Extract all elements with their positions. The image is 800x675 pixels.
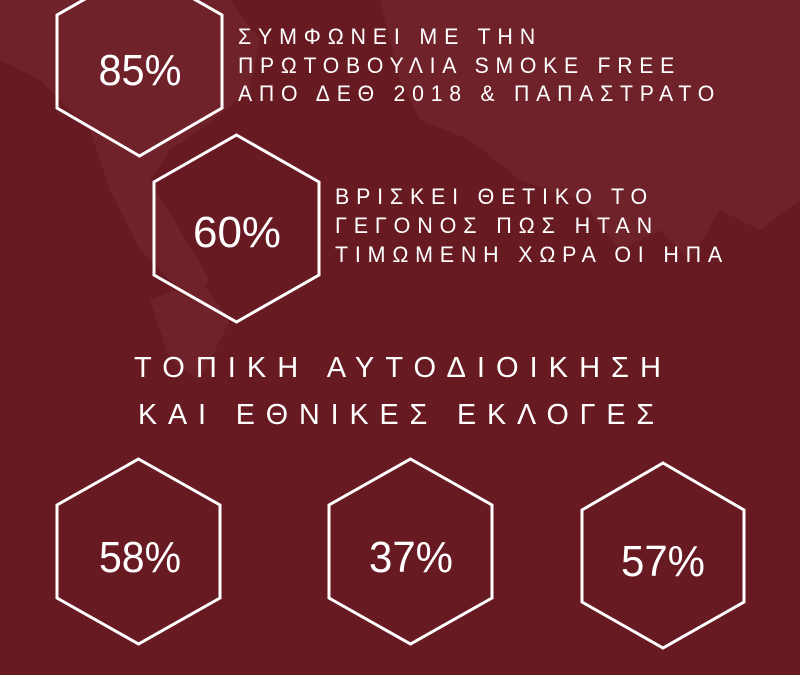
hexagon 85% bbox=[57, 0, 222, 156]
text: smoke free bbox=[238, 24, 721, 106]
hexagon 58% bbox=[57, 459, 220, 644]
text: USA: ΓΕΓΟΝΟΣ ΠΩΣ ΗΤΑΝ bbox=[335, 213, 659, 238]
text: smoke free: ΑΠΟ ΔΕΘ 2018 & ΠΑΠΑΣΤΡΑΤΟ bbox=[238, 81, 721, 106]
hexagon 85%: 85% bbox=[98, 46, 182, 95]
hexagon 37% bbox=[329, 459, 492, 644]
heading: ΤΟΠΙΚΗ ΑΥΤΟΔΙΟΙΚΗΣΗ bbox=[134, 352, 672, 384]
hexagon 58%: 58% bbox=[99, 533, 181, 582]
hexagon 57%: 57% bbox=[621, 537, 705, 586]
text: smoke free: ΠΡΩΤΟΒΟΥΛΙΑ SMOKE FREE bbox=[238, 53, 681, 78]
hexagon 57% bbox=[582, 463, 744, 648]
hexagon 37%: 37% bbox=[369, 533, 453, 582]
heading bbox=[134, 352, 672, 431]
heading: ΚΑΙ ΕΘΝΙΚΕΣ ΕΚΛΟΓΕΣ bbox=[138, 399, 665, 431]
text: USA bbox=[335, 184, 729, 267]
text: USA: ΤΙΜΩΜΕΝΗ ΧΩΡΑ ΟΙ ΗΠΑ bbox=[335, 242, 729, 267]
hexagon 60%: 60% bbox=[193, 208, 281, 257]
text: smoke free: ΣΥΜΦΩΝΕΙ ΜΕ ΤΗΝ bbox=[238, 24, 542, 49]
text: USA: ΒΡΙΣΚΕΙ ΘΕΤΙΚΟ ΤΟ bbox=[335, 184, 654, 209]
hexagon 60% bbox=[154, 135, 319, 322]
